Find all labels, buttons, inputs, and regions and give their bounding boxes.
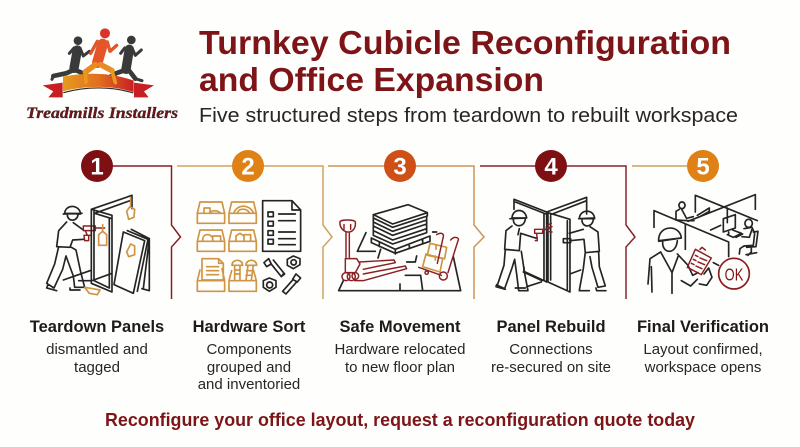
connector 4 (480, 166, 635, 299)
step 2 badge: 2 (241, 154, 255, 180)
step 5 badge (687, 150, 719, 182)
step 5 badge: 5 (696, 154, 710, 180)
icon: centre runner (100, 28, 110, 38)
step 5 label (637, 318, 769, 376)
icon: left runner (52, 36, 89, 79)
step 4 label: Connections (509, 341, 593, 358)
step 3 badge (384, 150, 416, 182)
step 3 label: Hardware relocated (335, 341, 465, 358)
step 2 label: and inventoried (198, 376, 300, 393)
icon: inspector with clipboard, cubicles and OK stamp (648, 195, 758, 293)
icon: right runner (107, 36, 142, 81)
logo wordmark: Treadmills Installers (26, 105, 178, 122)
call to action: Reconfigure your office layout, request a reconfiguration quote today (105, 409, 696, 430)
icon: sorted bins, checklist and bolts (197, 201, 301, 294)
step 2 label (193, 318, 306, 393)
step 1 label: dismantled and (46, 341, 148, 358)
connector 2 (177, 166, 332, 299)
subtitle: Five structured steps from teardown to rebuilt workspace (199, 104, 738, 127)
step 2 label: Hardware Sort (193, 318, 306, 336)
step 2 label: Components (206, 341, 292, 358)
step 4 label: Panel Rebuild (496, 318, 606, 336)
step 3 badge: 3 (393, 154, 407, 180)
step 3 label: to new floor plan (345, 359, 455, 376)
connector 3 (328, 166, 484, 299)
step 1 label: tagged (74, 359, 120, 376)
step 4 label (491, 318, 611, 376)
icon: stacked panels, pallet jack and hand truck (339, 205, 461, 291)
step 1 label: Teardown Panels (30, 318, 164, 336)
icon: ribbon (43, 74, 154, 97)
step 2 badge (232, 150, 264, 182)
title: Turnkey Cubicle Reconfiguration (199, 25, 731, 62)
step 5 label: Final Verification (637, 318, 769, 336)
icon: two workers rebuilding panel (496, 197, 606, 292)
step 2 label: grouped and (207, 359, 291, 376)
step 3 label: Safe Movement (339, 318, 461, 336)
icon: worker drilling and tagging panels (47, 195, 149, 295)
step 4 badge: 4 (544, 154, 558, 180)
step 3 label (335, 318, 465, 376)
title: and Office Expansion (199, 62, 544, 99)
OK stamp: OK (725, 264, 743, 284)
step 5 label: workspace opens (644, 359, 761, 376)
logo: Treadmills Installers (26, 28, 178, 122)
step 1 label (30, 318, 164, 376)
connector 5 (632, 165, 700, 167)
step 5 label: Layout confirmed, (643, 341, 763, 358)
step 1 badge: 1 (90, 154, 104, 180)
step 1 badge (81, 150, 113, 182)
step 4 badge (535, 150, 567, 182)
connector 1 (110, 166, 180, 299)
title (199, 25, 731, 99)
step 4 label: re-secured on site (491, 359, 611, 376)
